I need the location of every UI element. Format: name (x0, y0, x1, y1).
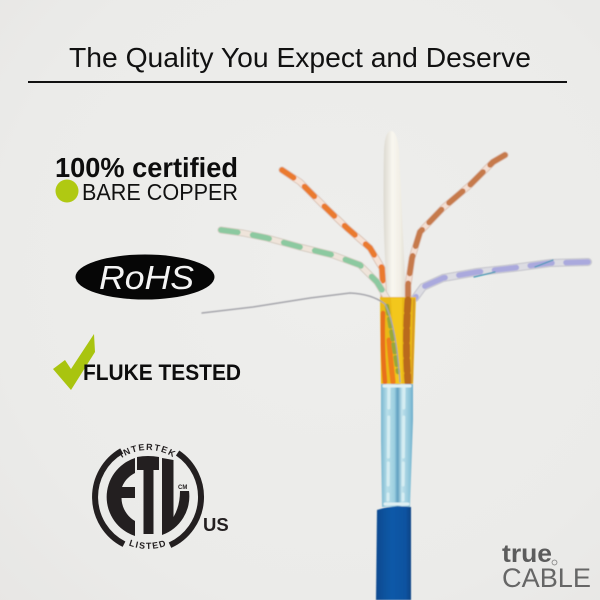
outer ring left (95, 451, 124, 544)
title underline (28, 81, 567, 83)
white filler strand (384, 131, 406, 298)
letter L (162, 458, 189, 535)
green twisted pair (221, 230, 388, 300)
orange twisted pair (282, 170, 384, 300)
label: fluke tested: FLUKE TESTED (83, 360, 241, 385)
badge: Fluke tested (53, 334, 241, 390)
label: bare copper: BARE COPPER (82, 179, 238, 205)
outer ring right (170, 453, 201, 545)
logo registered mark (552, 560, 557, 565)
yellow shield wrap (380, 297, 416, 386)
title: The Quality You Expect and Deserve (69, 42, 531, 73)
headline: 100% certified: 100% certified (55, 152, 238, 183)
text: LISTED: LISTED (129, 540, 166, 549)
icon: green check mark (53, 334, 95, 390)
badge: 100% certified bare copper (55, 152, 238, 205)
text: US: US (203, 514, 229, 535)
badge: RoHS (76, 254, 214, 300)
foil shield (381, 384, 413, 507)
badge: ETL listed mark (92, 444, 229, 549)
blue twisted pair (415, 260, 588, 298)
text: INTERTEK: INTERTEK (120, 444, 176, 458)
letter T (137, 456, 159, 534)
logo word: CABLE: CABLE (502, 563, 591, 593)
badge: RoHS: RoHS (99, 259, 194, 296)
blue outer jacket (376, 506, 411, 600)
drain wire (202, 293, 400, 382)
logo word: true: true (502, 540, 552, 568)
copper twisted pair (408, 155, 505, 300)
letter E (107, 458, 135, 536)
cable photo illustration (202, 131, 588, 600)
logo: trueCABLE (502, 540, 591, 593)
icon: green dot (56, 180, 78, 202)
text: CM: CM (178, 485, 187, 491)
